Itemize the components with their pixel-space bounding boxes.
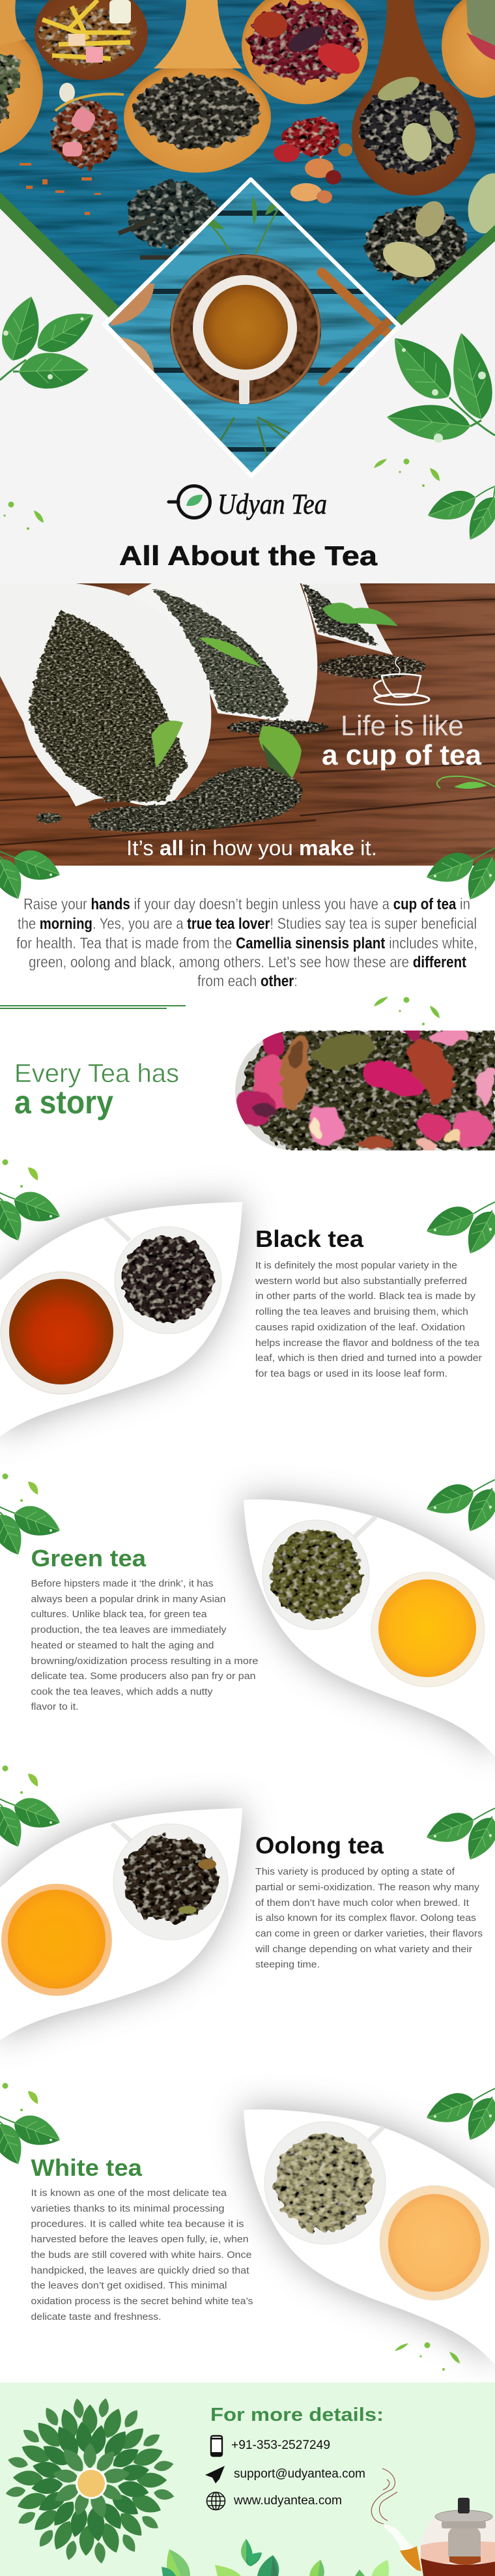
text: life is like: Life is like bbox=[341, 710, 464, 742]
logo text: Udyan Tea bbox=[218, 488, 327, 520]
image: oolong tea leaves on plate bbox=[112, 1824, 228, 1940]
text: website: www.udyantea.com bbox=[233, 2494, 342, 2508]
body: green tea: cook the tea leaves, which adds a nutty bbox=[31, 1687, 213, 1697]
sprig: lower right small bbox=[423, 485, 495, 546]
body: black tea: western world but also substantially preferred bbox=[255, 1276, 467, 1287]
heading: every tea has: Every Tea has bbox=[14, 1059, 179, 1088]
body: oolong tea: can come in green or darker varieties, their flavors bbox=[255, 1929, 483, 1939]
steam bbox=[371, 2468, 397, 2524]
heading: a story: a story bbox=[14, 1084, 113, 1120]
photo: tea spoons on blue wood bbox=[0, 0, 495, 339]
drifting leaves: above capsule bbox=[374, 997, 440, 1025]
drifting leaves bbox=[3, 1473, 38, 1502]
cup bbox=[239, 372, 249, 404]
body: white tea: varieties thanks to its minimal processing bbox=[31, 2204, 224, 2214]
body: white tea: procedures. It is called white tea because it is bbox=[31, 2219, 244, 2229]
sprig right bbox=[422, 2088, 495, 2146]
body: white tea: harvested before the leaves open fully, ie, when bbox=[31, 2234, 249, 2245]
capsule photo: tea with petals bbox=[233, 1023, 495, 1152]
image: cup of black tea bbox=[1, 1272, 123, 1394]
image: black tea leaves on plate bbox=[106, 1218, 221, 1334]
intro paragraph: green, oolong and black, among others. Let's see how these are different bbox=[29, 954, 466, 971]
body: black tea: for tea bags or used in its loose leaf form. bbox=[255, 1369, 447, 1379]
heading: black tea: Black tea bbox=[255, 1225, 364, 1252]
body: white tea: oxidation process is the secret behind white tea’s bbox=[31, 2296, 253, 2307]
scattered leaves bbox=[89, 767, 302, 831]
body: white tea bbox=[31, 2188, 253, 2322]
body: green tea: cultures. Unlike black tea, for green tea bbox=[31, 1609, 207, 1620]
body: black tea bbox=[255, 1261, 482, 1379]
image: cup of green tea bbox=[371, 1572, 485, 1687]
diamond photo: cup of tea bbox=[104, 176, 404, 479]
body: oolong tea bbox=[255, 1867, 483, 1970]
middle bag bbox=[126, 583, 317, 726]
drifting leaves: upper right bbox=[374, 459, 440, 487]
icon: white tea cup bbox=[374, 657, 429, 705]
flourish bbox=[437, 776, 495, 788]
body: green tea: delicate tea. Some producers also pan fry or pan bbox=[31, 1671, 255, 1682]
heading: white tea: White tea bbox=[31, 2154, 143, 2181]
logo: Udyan Tea bbox=[169, 486, 327, 520]
panel: top header bbox=[0, 0, 495, 583]
heading: oolong tea: Oolong tea bbox=[255, 1832, 384, 1859]
body: black tea: It is definitely the most popular variety in the bbox=[255, 1261, 457, 1271]
leaf card: oolong tea bbox=[0, 1808, 242, 2040]
body: oolong tea: This variety is produced by opting a state of bbox=[255, 1867, 455, 1877]
image: cup of white tea bbox=[380, 2186, 489, 2300]
body: green tea: browning/oxidization process resulting in a more bbox=[31, 1656, 258, 1667]
sprig left bbox=[0, 1793, 64, 1852]
icon: paper plane bbox=[205, 2466, 225, 2483]
leaf card: black tea bbox=[0, 1202, 242, 1437]
sprig right bbox=[422, 1479, 495, 1537]
body: oolong tea: is also known for its complex flavor. Oolong teas bbox=[255, 1913, 476, 1924]
sprig: upper left large bbox=[0, 291, 101, 389]
image: cup of oolong tea bbox=[1, 1884, 112, 1996]
image: tea leaf flower bbox=[5, 2397, 175, 2564]
panel: green tea bbox=[0, 1473, 495, 1757]
sprig right bbox=[422, 1808, 495, 1866]
body: white tea: delicate taste and freshness. bbox=[31, 2312, 162, 2322]
body: oolong tea: steeping time. bbox=[255, 1959, 320, 1970]
saucer bbox=[170, 254, 321, 404]
drifting leaves bbox=[3, 1765, 38, 1794]
panel: footer bbox=[0, 2382, 495, 2576]
sprig: hero left bbox=[0, 845, 64, 904]
image: white tea leaves on plate bbox=[264, 2122, 386, 2244]
sprig left bbox=[0, 1186, 64, 1246]
green band left bbox=[0, 192, 119, 319]
body: green tea: heated or steamed to halt the aging and bbox=[31, 1641, 214, 1651]
body: oolong tea: of them don’t have much color when brewed. It bbox=[255, 1898, 469, 1909]
body: green tea: flavor to it. bbox=[31, 1702, 78, 1712]
decorative leaves row bbox=[162, 2539, 389, 2576]
sprig left bbox=[0, 2110, 64, 2169]
leaf card: white tea bbox=[244, 2109, 495, 2365]
sprig: hero right bbox=[422, 847, 495, 905]
intro paragraph: from each other: bbox=[197, 973, 298, 990]
sprig left bbox=[0, 1500, 64, 1560]
body: black tea: in other parts of the world. Black tea is made by bbox=[255, 1291, 476, 1302]
image: green tea leaves on plate bbox=[262, 1517, 376, 1630]
green band right bbox=[396, 225, 495, 329]
body: green tea: production, the tea leaves are immediately bbox=[31, 1625, 227, 1635]
body: white tea: the buds are still covered with white hairs. Once bbox=[31, 2250, 251, 2261]
intro paragraph: Raise your hands if your day doesn’t begin unless you have a cup of tea in bbox=[23, 896, 470, 913]
sprig: upper right large bbox=[380, 325, 495, 443]
body: oolong tea: will change depending on what variety and their bbox=[255, 1944, 472, 1955]
heading: green tea: Green tea bbox=[31, 1545, 147, 1572]
body: black tea: rolling the tea leaves and bruising them, which bbox=[255, 1307, 468, 1317]
panel: black tea bbox=[0, 1159, 495, 1437]
icon: phone bbox=[211, 2436, 222, 2456]
body: white tea: the leaves don’t get oxidised. This minimal bbox=[31, 2281, 227, 2291]
body: oolong tea: partial or semi-oxidization. The reason why many bbox=[255, 1882, 480, 1893]
title: All About the Tea bbox=[119, 540, 378, 571]
text: phone: +91-353-2527249 bbox=[231, 2438, 330, 2452]
leaf card: green tea bbox=[244, 1499, 495, 1757]
teapot bbox=[384, 2498, 495, 2576]
intro paragraph: for health. Tea that is made from the Camellia sinensis plant includes white, bbox=[16, 935, 477, 952]
panel: hero photo of tea bags bbox=[0, 583, 495, 866]
body: black tea: causes rapid oxidization of the leaf. Oxidation bbox=[255, 1323, 465, 1333]
back bag bbox=[302, 583, 393, 655]
body: black tea: helps increase the flavor and boldness of the tea bbox=[255, 1338, 480, 1349]
text: email: support@udyantea.com bbox=[234, 2467, 365, 2481]
panel: white tea bbox=[0, 2083, 495, 2371]
body: white tea: It is known as one of the most delicate tea bbox=[31, 2188, 227, 2199]
body: green tea: Before hipsters made it ‘the drink’, it has bbox=[31, 1579, 214, 1589]
body: green tea bbox=[31, 1579, 258, 1712]
icon: globe bbox=[207, 2493, 225, 2510]
drifting leaves bbox=[3, 2083, 38, 2111]
body: black tea: leaf, which is then dried and turned into a powder bbox=[255, 1353, 482, 1364]
sprig right bbox=[422, 1201, 495, 1259]
logo mark bbox=[169, 486, 210, 518]
drifting leaves: left bbox=[3, 502, 44, 530]
heading: for more details: For more details: bbox=[210, 2405, 384, 2425]
drifting leaves bbox=[3, 1159, 38, 1188]
panel: oolong tea bbox=[0, 1765, 495, 2040]
body: white tea: handpicked, the leaves are quickly dried so that bbox=[31, 2266, 249, 2276]
double rule bbox=[0, 1005, 186, 1009]
front bag bbox=[0, 583, 211, 809]
body: green tea: always been a popular drink in many Asian bbox=[31, 1594, 225, 1605]
drifting leaves: bottom right bbox=[395, 2343, 460, 2371]
text: a cup of tea: a cup of tea bbox=[322, 739, 482, 771]
intro paragraph bbox=[16, 896, 477, 990]
text: it's all in how you make it: It’s all in how you make it. bbox=[126, 836, 377, 860]
